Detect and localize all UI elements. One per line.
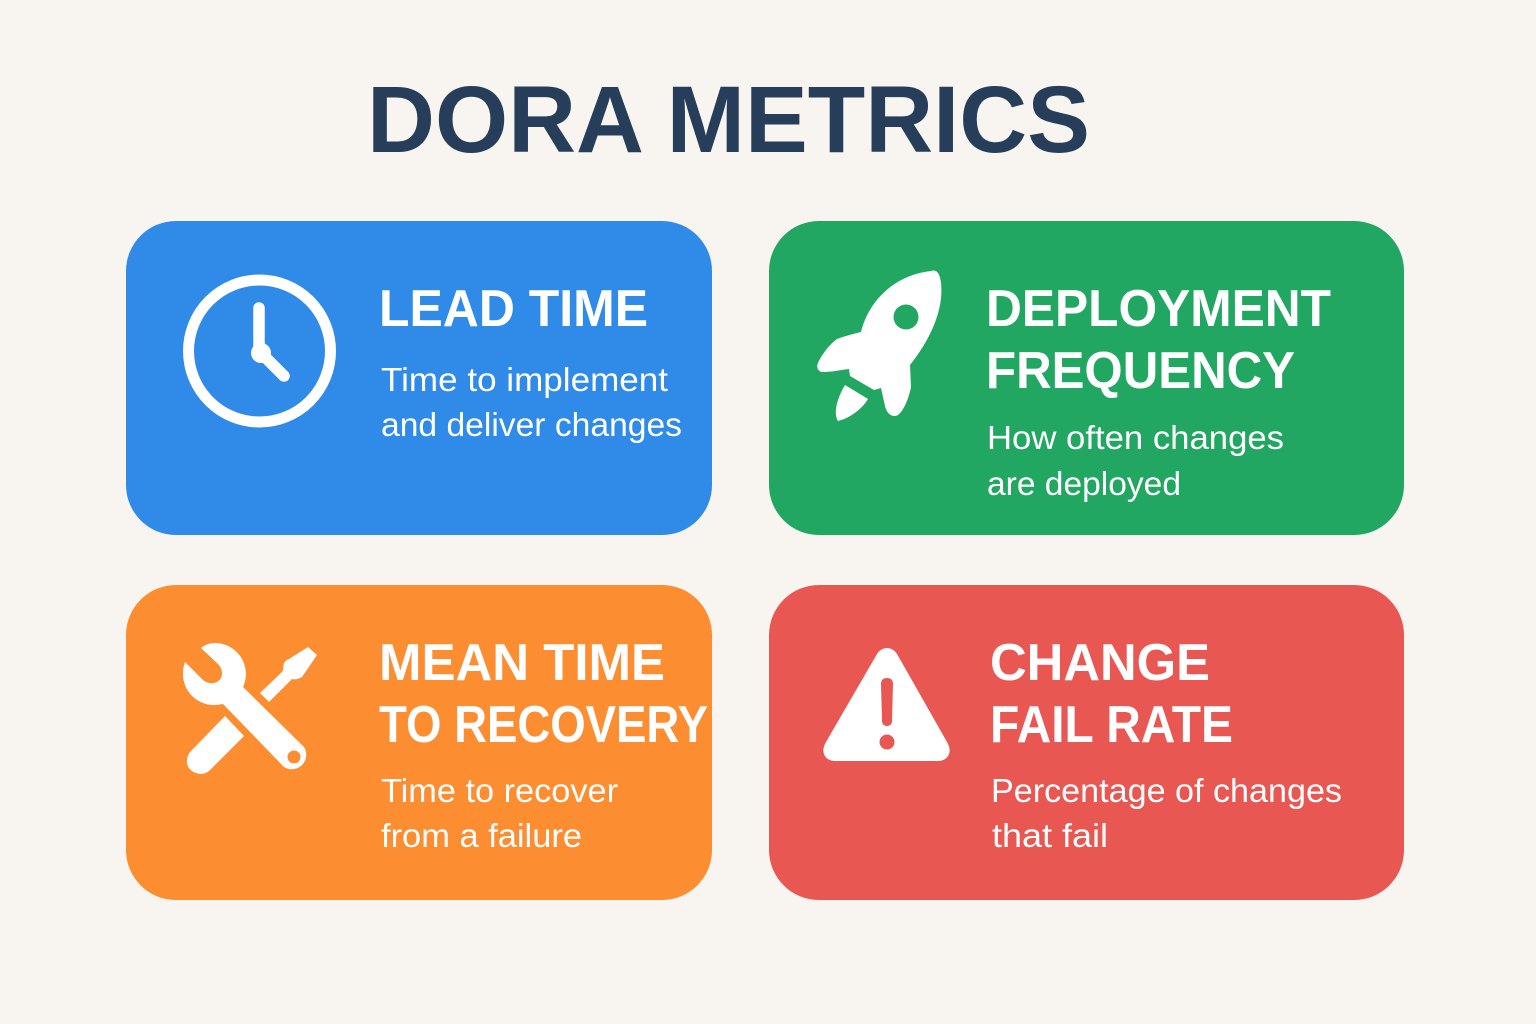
heading: mean time to recovery: TO RECOVERY: [379, 696, 708, 754]
icon: rocket: [817, 271, 941, 421]
card background: mean time to recovery: [126, 585, 712, 900]
heading: mean time to recovery: [379, 634, 708, 754]
description: mean time to recovery: from a failure: [381, 818, 582, 855]
panel: deployment frequency: [769, 221, 1404, 535]
icon: wrench and screwdriver: [183, 643, 317, 774]
heading: deployment frequency: DEPLOYMENT: [986, 280, 1331, 338]
description: lead time: and deliver changes: [381, 407, 682, 444]
title: DORA METRICS: [367, 67, 1090, 173]
panel: change fail rate: [769, 585, 1404, 900]
description: lead time: [381, 362, 682, 444]
description: change fail rate: that fail: [992, 818, 1108, 855]
heading: deployment frequency: [986, 280, 1331, 400]
icon: clock: [188, 280, 330, 422]
description: change fail rate: Percentage of changes: [991, 773, 1342, 810]
card background: deployment frequency: [769, 221, 1404, 535]
card background: change fail rate: [769, 585, 1404, 900]
panel: mean time to recovery: [126, 585, 712, 900]
heading: change fail rate: FAIL RATE: [990, 696, 1233, 754]
description: deployment frequency: are deployed: [987, 466, 1181, 503]
description: lead time: Time to implement: [381, 362, 669, 399]
description: deployment frequency: How often changes: [987, 420, 1284, 457]
card background: lead time: [126, 221, 712, 535]
description: mean time to recovery: Time to recover: [381, 773, 618, 810]
description: deployment frequency: [987, 420, 1284, 503]
heading: deployment frequency: FREQUENCY: [986, 342, 1295, 400]
heading: change fail rate: [990, 634, 1233, 754]
panel: lead time: [126, 221, 712, 535]
icon: warning triangle: [823, 648, 950, 761]
heading: lead time: LEAD TIME: [379, 280, 648, 338]
heading: change fail rate: CHANGE: [990, 634, 1210, 692]
description: mean time to recovery: [381, 773, 618, 855]
description: change fail rate: [991, 773, 1342, 855]
heading: mean time to recovery: MEAN TIME: [379, 634, 665, 692]
